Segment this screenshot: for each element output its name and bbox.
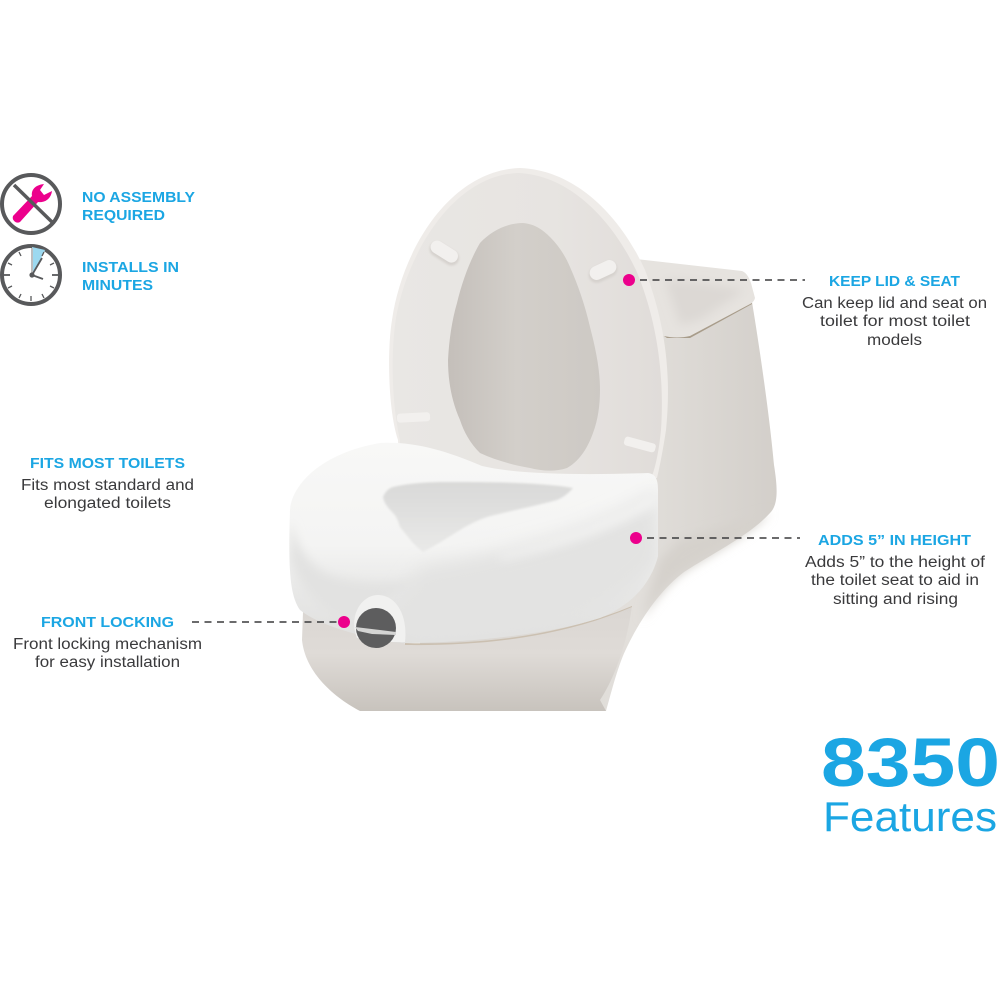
- callout: keep lid and seat: KEEP LID & SEAT: [829, 273, 960, 290]
- seat opening: [383, 482, 573, 552]
- callout: front locking: [13, 614, 350, 671]
- heading: installs in minutes: MINUTES: [82, 277, 153, 294]
- heading: no assembly required: REQUIRED: [82, 207, 165, 224]
- callout: front locking: FRONT LOCKING: [41, 614, 174, 631]
- callout: fits most toilets: [21, 455, 194, 512]
- lid opening: [448, 223, 600, 471]
- callout: front locking: for easy installation: [35, 654, 180, 671]
- heading: installs in minutes: [82, 259, 179, 294]
- heading: no assembly required: [82, 189, 195, 224]
- title: model number and features: Features: [823, 793, 997, 840]
- callout: front locking: Front locking mechanism: [13, 636, 202, 653]
- callout: fits most toilets: FITS MOST TOILETS: [30, 455, 185, 472]
- callout: fits most toilets: elongated toilets: [44, 495, 171, 512]
- raised seat: [280, 440, 670, 650]
- callout: keep lid and seat: models: [867, 332, 922, 349]
- heading: no assembly required: NO ASSEMBLY: [82, 189, 195, 206]
- callout: adds 5 inches in height: ADDS 5” IN HEIGHT: [818, 532, 971, 549]
- icon: clock: [2, 246, 60, 304]
- infographic canvas: [0, 168, 997, 832]
- callout: keep lid and seat: toilet for most toilet: [820, 313, 971, 330]
- title: model number and features: 8350: [821, 724, 1000, 801]
- front locking knob: [354, 595, 405, 648]
- callout: adds 5 inches in height: Adds 5” to the height of: [805, 554, 986, 571]
- callout: adds 5 inches in height: sitting and rising: [833, 591, 958, 608]
- lid rim: [389, 168, 668, 478]
- product photo: toilet with raised seat: [280, 168, 777, 711]
- title: model number and features: [821, 724, 1000, 840]
- callout: keep lid and seat: [623, 273, 987, 349]
- lid bumpers: [397, 238, 656, 453]
- icon: no assembly wrench: [2, 175, 60, 233]
- heading: installs in minutes: INSTALLS IN: [82, 259, 179, 276]
- callout: adds 5 inches in height: [630, 532, 986, 608]
- toilet bowl base: [302, 606, 632, 711]
- toilet tank and side body: [420, 302, 777, 711]
- lid inner surface: [393, 173, 662, 476]
- callout: keep lid and seat: Can keep lid and seat on: [802, 295, 987, 312]
- tank lid: [636, 259, 755, 337]
- wrench: [13, 184, 52, 223]
- callout: adds 5 inches in height: the toilet seat to aid in: [811, 572, 979, 589]
- callout: fits most toilets: Fits most standard and: [21, 477, 194, 494]
